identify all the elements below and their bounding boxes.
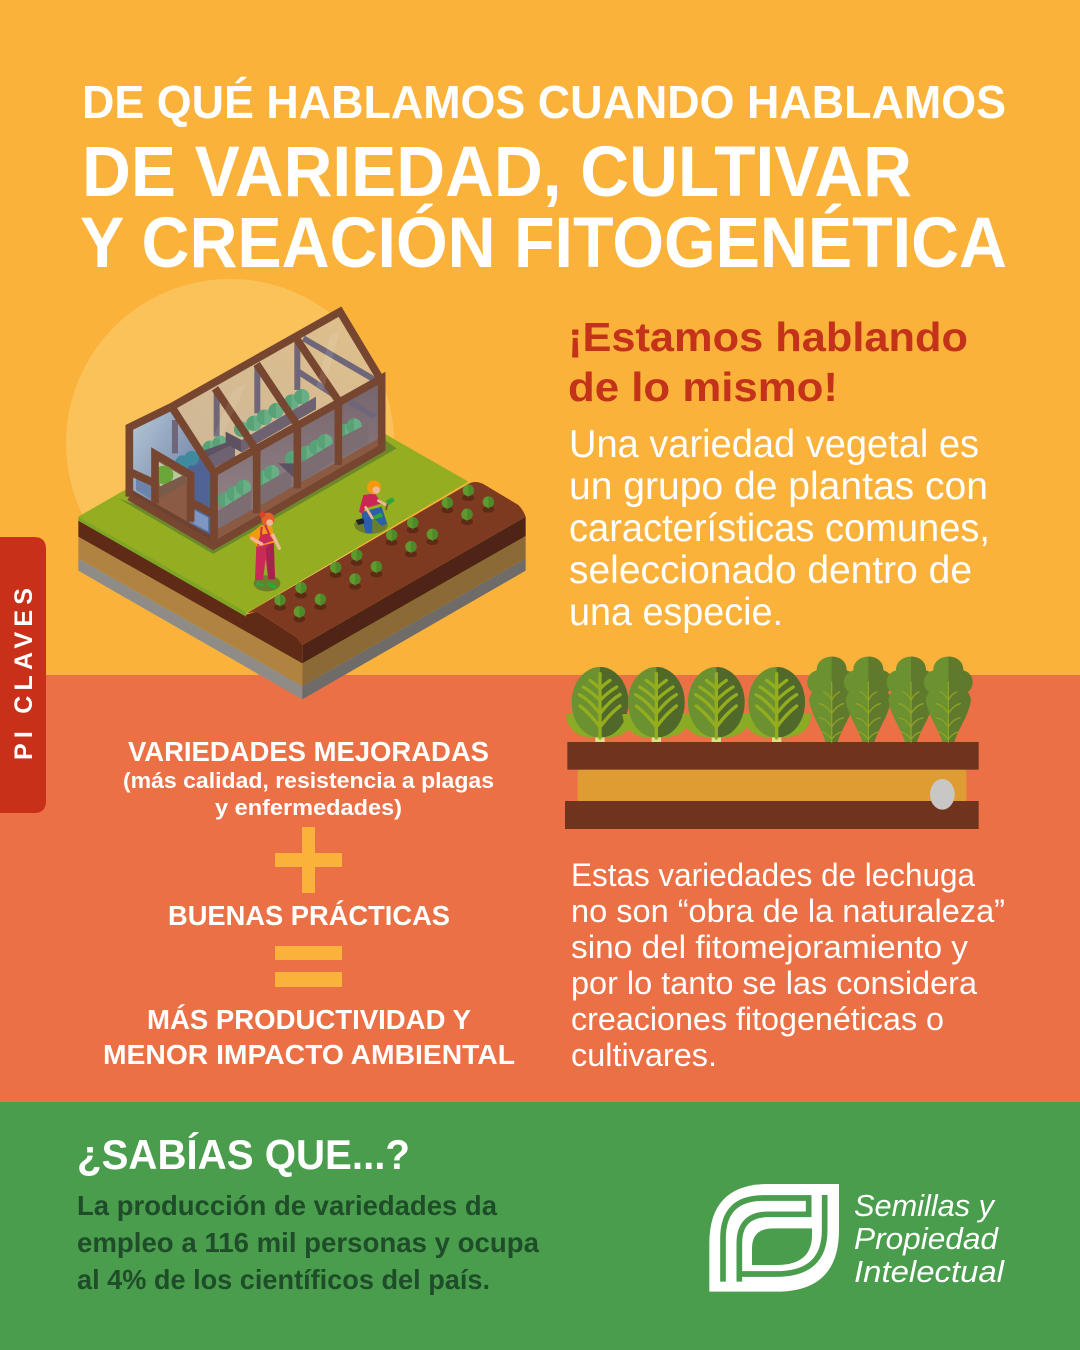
logo: wordmark: Intelectual — [854, 1254, 1005, 1289]
side tab: PI claves — [0, 537, 46, 813]
title: DE VARIEDAD, CULTIVAR — [82, 133, 912, 212]
heading: estamos hablando de lo mismo: de lo mismo! — [568, 364, 838, 410]
side tab: PI claves: PI CLAVES — [10, 588, 38, 760]
background: orange top band — [0, 0, 1080, 675]
label: result — [103, 1004, 515, 1070]
text block: employment fact: empleo a 116 mil personas y ocupa — [77, 1227, 539, 1258]
text block: lettuce varieties explanation: cultivares. — [571, 1037, 717, 1073]
lettuces — [566, 657, 973, 742]
heading: sabias que: ¿SABÍAS QUE...? — [77, 1131, 410, 1178]
label: variedades mejoradas — [123, 736, 494, 820]
illustration: isometric greenhouse plot — [78, 312, 526, 699]
seedlings — [274, 485, 494, 622]
logo: wordmark — [854, 1188, 1005, 1289]
icon: plus sign — [275, 827, 342, 893]
text block: definition of plant variety: un grupo de plantas con — [569, 465, 988, 508]
soil layers — [565, 742, 979, 829]
label: variedades mejoradas: (más calidad, resistencia a plagas — [123, 768, 494, 793]
text block: lettuce varieties explanation: no son “obra de la naturaleza” — [571, 893, 1005, 929]
illustration: lettuce row and soil — [565, 657, 979, 829]
equation: improved varieties plus good practices — [103, 736, 515, 1070]
text block: definition of plant variety: una especie. — [569, 591, 783, 634]
logo: wordmark: Propiedad — [854, 1221, 1000, 1256]
terrain layers — [78, 387, 526, 699]
greenhouse — [118, 312, 397, 554]
text block: definition of plant variety: seleccionado dentro de — [569, 549, 972, 592]
heading: estamos hablando de lo mismo — [568, 314, 968, 410]
icon: equals sign — [275, 946, 342, 987]
label: variedades mejoradas: y enfermedades) — [215, 795, 402, 820]
illustration: sun circle — [66, 279, 394, 607]
text block: definition of plant variety — [569, 423, 990, 634]
logo: wordmark: Semillas y — [854, 1188, 996, 1223]
text block: lettuce varieties explanation: por lo tanto se las considera — [571, 965, 977, 1001]
label: variedades mejoradas: VARIEDADES MEJORADAS — [128, 736, 489, 767]
label: result: MENOR IMPACTO AMBIENTAL — [103, 1039, 515, 1070]
text block: employment fact: La producción de variedades da — [77, 1190, 497, 1221]
heading: estamos hablando de lo mismo: ¡Estamos hablando — [568, 314, 968, 360]
title: Y CREACIÓN FITOGENÉTICA — [80, 204, 1007, 283]
illustration: two farmers — [248, 480, 395, 591]
label: buenas practicas: BUENAS PRÁCTICAS — [168, 900, 450, 931]
text block: definition of plant variety: características comunes, — [569, 507, 990, 550]
text block: employment fact — [77, 1190, 539, 1295]
standing farmer — [248, 512, 280, 591]
text block: lettuce varieties explanation: creaciones fitogenéticas o — [571, 1001, 944, 1037]
background: coral middle band — [0, 675, 1080, 1102]
title — [80, 76, 1007, 283]
text block: definition of plant variety: Una variedad vegetal es — [569, 423, 979, 466]
text block: lettuce varieties explanation — [571, 857, 1005, 1073]
logo: leaf mark — [709, 1184, 839, 1292]
kneeling farmer — [354, 480, 395, 534]
title: DE QUÉ HABLAMOS CUANDO HABLAMOS — [82, 76, 1006, 128]
text block: lettuce varieties explanation: sino del fitomejoramiento y — [571, 929, 968, 965]
background: green bottom band — [0, 1102, 1080, 1350]
text block: lettuce varieties explanation: Estas variedades de lechuga — [571, 857, 975, 893]
text block: employment fact: al 4% de los científicos del país. — [77, 1264, 490, 1295]
label: result: MÁS PRODUCTIVIDAD Y — [147, 1004, 471, 1035]
